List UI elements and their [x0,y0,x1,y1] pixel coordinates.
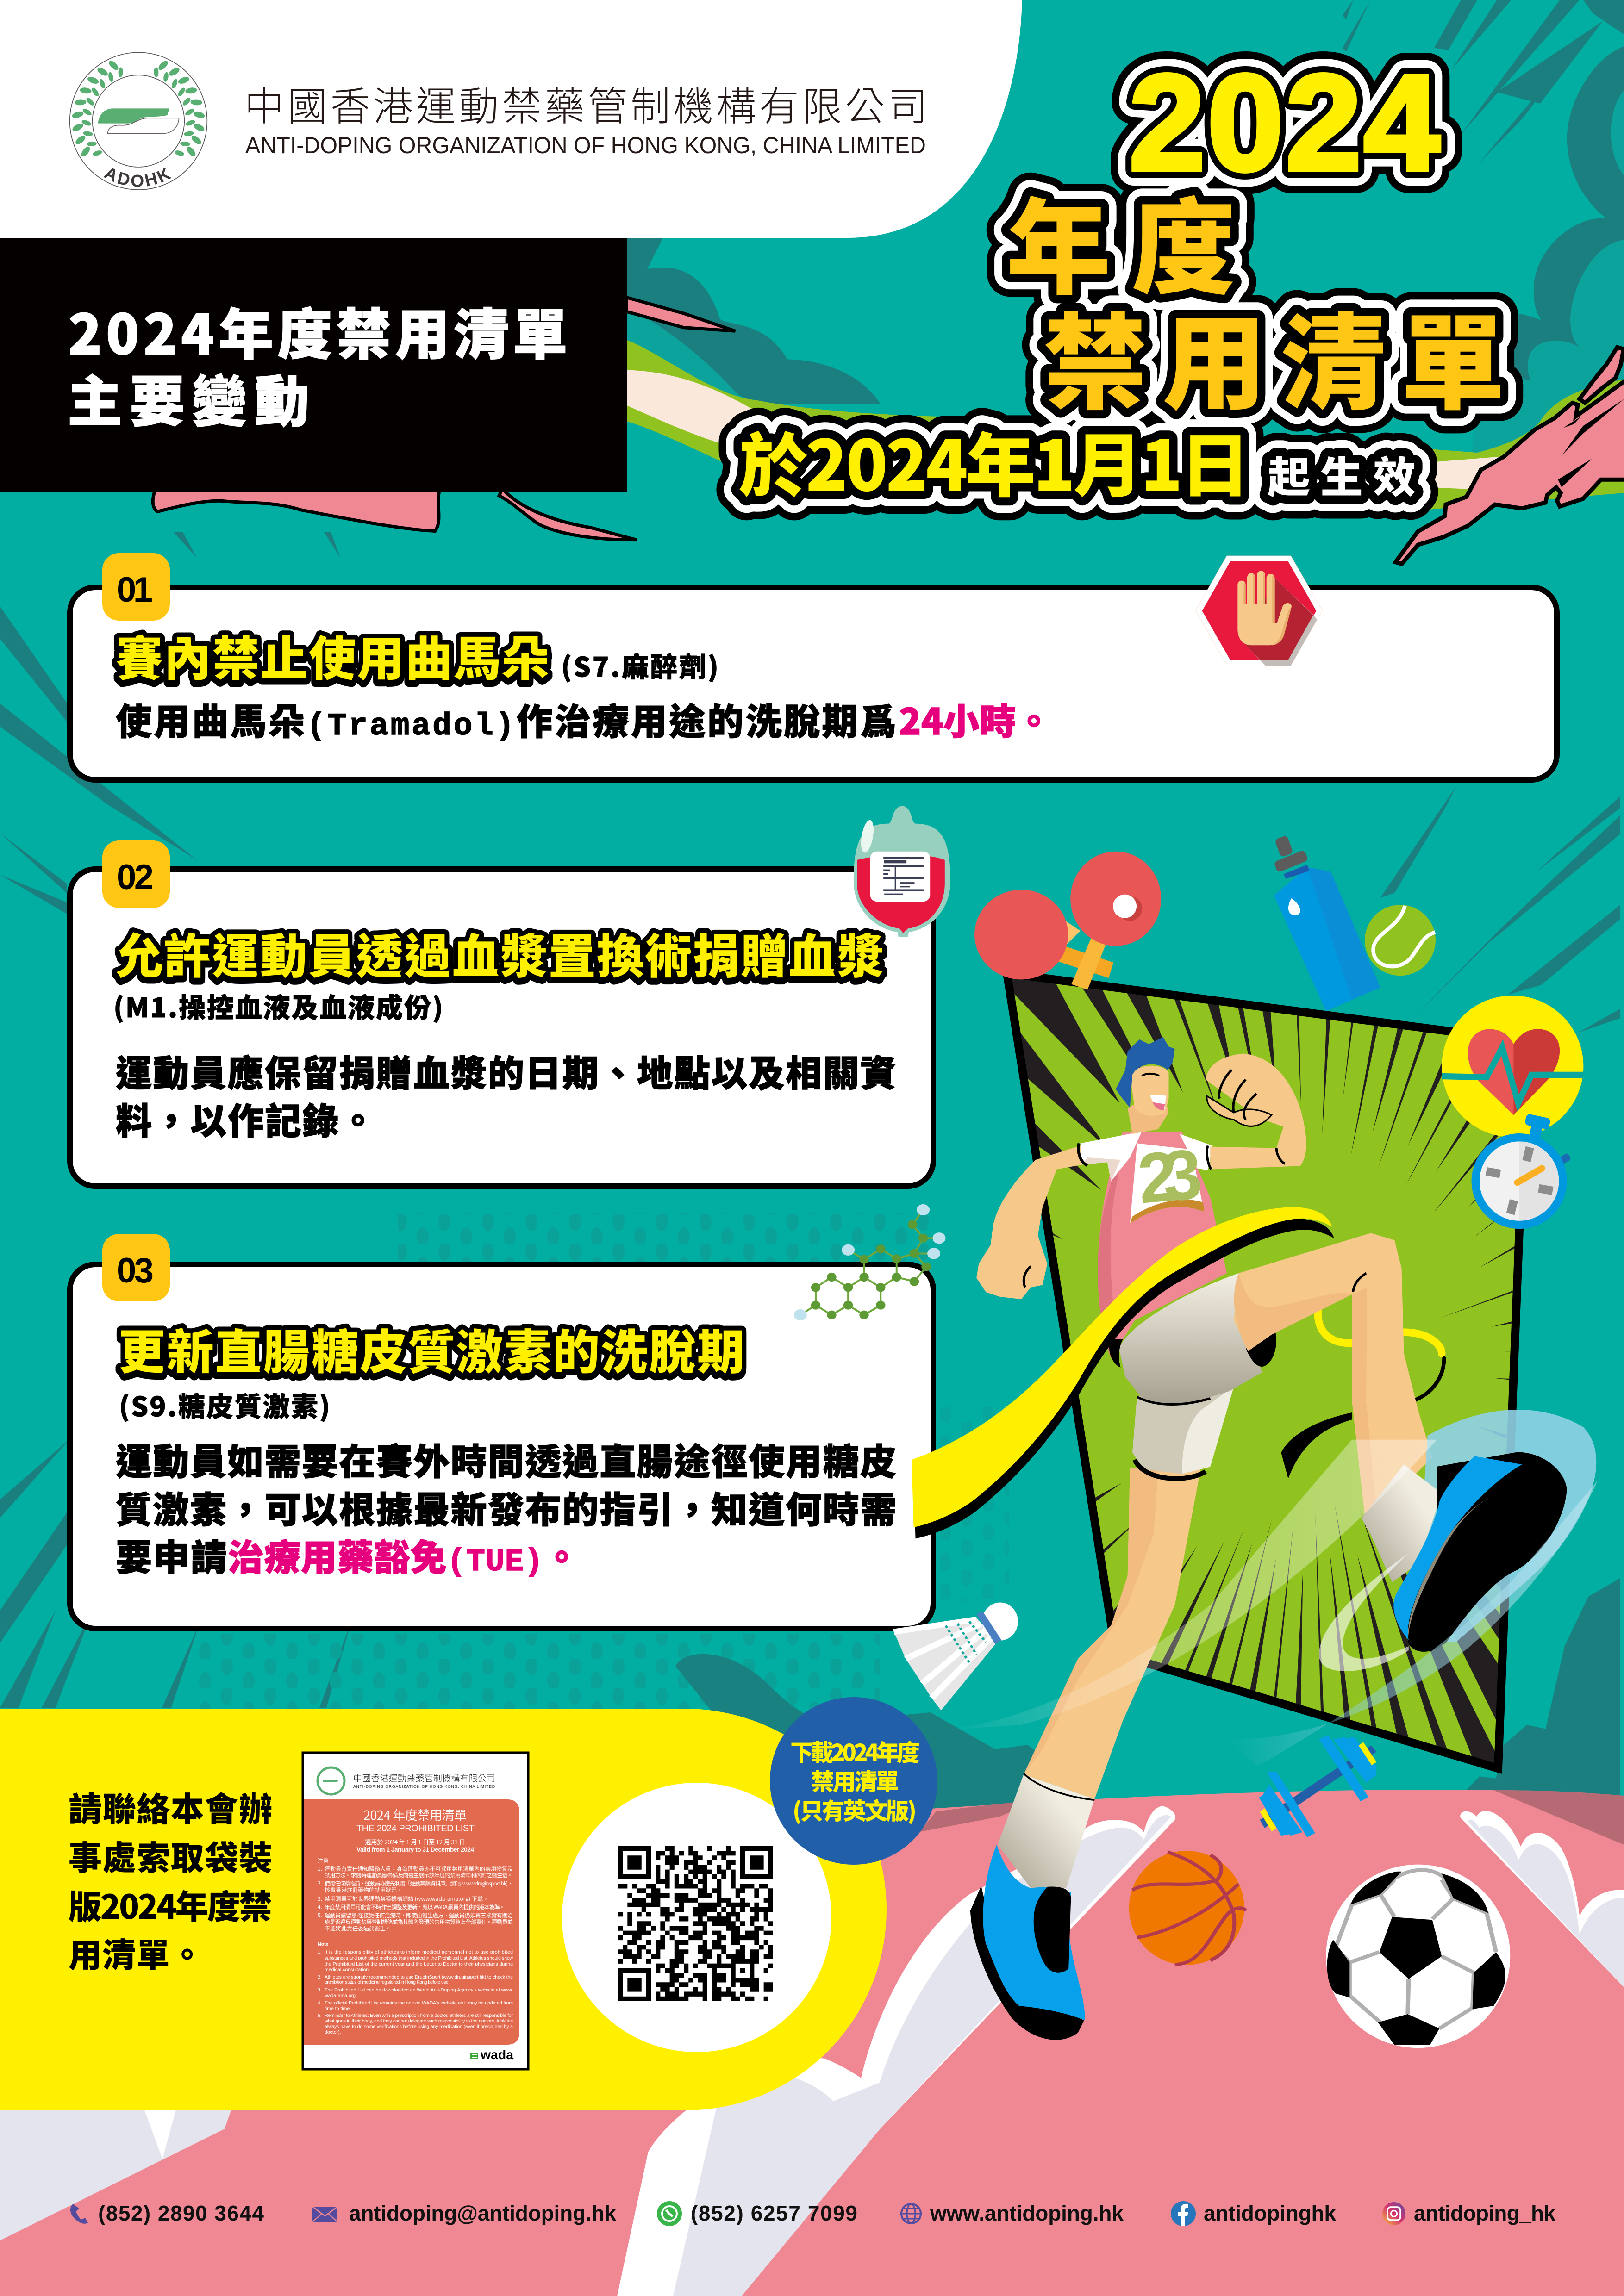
main title: 起生效 [1268,443,1416,505]
icon: stopwatch [1472,1114,1571,1229]
icon: table tennis paddles [974,852,1161,990]
badge 03 [102,1234,170,1301]
whatsapp: (852) 6257 7099 [691,2201,857,2225]
english name: ANTI-DOPING ORGANIZATION OF HONG KONG, CHINA LIMITED [245,132,926,158]
pale dot pattern [194,1213,1009,1710]
main title: 起生效 [1268,443,1416,505]
main title: 禁用清單 [1043,280,1505,430]
mini notes english: 5. [318,2013,322,2018]
mini notes english: prohibition status of medicine registered in Hong Kong before use. [325,1979,450,1985]
badge 03: 03 [117,1251,154,1290]
mini notes chinese: 療是否違反運動禁藥管制規條並為其體內發現的禁用物質負上全部責任。運動員並 [325,1918,513,1926]
main title: 2024 [1129,46,1441,199]
decorative hills upper right [1418,46,1624,510]
heading 03: 更新直腸糖皮質激素的洗脫期 [119,1315,744,1383]
panel heading line two: 主要變動 [68,358,309,437]
request text line two: 事處索取袋裝 [69,1831,272,1879]
mini notes english: Reminder to Athletes: Even with a prescription from a doctor, athletes are still responsible for [325,2013,513,2018]
mini notes chinese: 禁用方法。求醫時運動員應帶備及向醫生展示該年度的禁用清單和內附之醫生信。 [325,1871,513,1879]
yellow request panel [0,1709,887,2110]
badge line three: (只有英文版) [793,1793,917,1826]
mini org english: ANTI-DOPING ORGANIZATION OF HONG KONG, CHINA LIMITED [353,1784,495,1789]
effective date: 於2024年1月1日 [738,411,1250,511]
mini validity: 適用於 2024 年 1 月 1 日至 12 月 31 日 [365,1837,465,1846]
main title: 年度 [1006,164,1236,315]
mini notes english [318,1941,513,2035]
mini notes english: the Prohibited List of the current year and the Letter to Doctor to their physicians during [325,1961,513,1967]
black heading panel [0,238,627,492]
white splash left [617,1806,1175,2296]
raised leg [1234,1233,1432,1528]
main title: 起生效 [1268,443,1416,505]
mini notes english: 2. [318,1974,322,1980]
effective suffix: 起生效 [1268,443,1416,505]
mini notes chinese: 3. [318,1895,322,1903]
mini notes english: wada-ama.org. [324,1993,357,1998]
mini notes english: Note [318,1941,328,1947]
title line: prohibited list: 禁用清單 [1043,280,1505,430]
card 03 [70,1234,933,1629]
body 01: 使用曲馬朵(Tramadol)作治療用途的洗脫期爲 [116,693,896,745]
highlighted TUE: 治療用藥豁免(TUE)。 [228,1529,580,1581]
reference 03: (S9.糖皮質激素) [119,1385,330,1424]
download badge [770,1697,937,1865]
icon: blood bag [854,806,950,937]
mini notes chinese: 使用任何藥物前，運動員亦應先利用「運動禁藥資料庫」網站 (www.druginsport.hk)， [325,1879,513,1887]
pink hand shape right [1395,347,1624,564]
mini notes chinese: 核實香港註冊藥物的禁用狀況。 [325,1886,402,1894]
main title: 於2024年1月1日 [738,411,1250,511]
icon: dumbbell [1259,1735,1376,1837]
pink hand shape upper left [153,298,735,540]
mini notes english: what goes in their body, and they cannot delegate such responsibility to the doctors. Athletes [324,2018,513,2024]
decorative bands beside black panel [626,238,1036,503]
mini notes chinese: 禁用清單可於世界運動禁藥機構網站 (www.wada-ama.org) 下載。 [325,1895,488,1903]
top white header panel [0,0,1022,238]
request text line one: 請聯絡本會辦 [69,1782,272,1831]
mini notes chinese: 4. [318,1903,322,1911]
speed trails [931,1440,1598,1766]
comic burst frame [1003,974,1524,1774]
request text line four: 用清單。 [69,1928,204,1977]
chinese name: 中國香港運動禁藥管制機構有限公司 [244,74,928,132]
body 02 line one: 運動員應保留捐贈血漿的日期、地點以及相關資 [116,1045,896,1097]
facebook: antidopinghk [1204,2201,1336,2225]
phone: (852) 2890 3644 [98,2201,264,2225]
bib number: 23 [1135,1134,1205,1219]
title line: annual: 年度 [1006,164,1236,315]
main title: 年度 [1006,164,1236,315]
organisation logo [70,52,207,190]
request text line three: 版2024年度禁 [69,1880,272,1929]
white splash right [1460,1811,1624,1987]
organisation name [244,74,928,158]
mini notes chinese: 不能將此責任委過於醫生。 [325,1924,391,1932]
pocket prohibited list thumbnail [303,1753,528,2069]
background dark streaks [0,0,1624,1708]
mini notes chinese: 2. [318,1879,322,1887]
reference 01: (S7.麻醉劑) [561,646,718,684]
main title [738,46,1505,511]
light blue swoosh behind raised shoe [1409,1410,1596,1642]
running track ground [0,1790,1624,2296]
rear leg and foot [970,1468,1201,2040]
badge line two: 禁用清單 [811,1764,899,1797]
main title: 於2024年1月1日 [738,411,1250,511]
card 01 [70,553,1557,780]
reference 02: (M1.操控血液及血液成份) [113,986,443,1025]
icon: water bottle [1274,835,1380,1011]
icon: stop hand [1196,556,1323,666]
main title: 禁用清單 [1043,280,1505,430]
rear ribbon loop [1281,1310,1444,1479]
website: www.antidoping.hk [930,2201,1124,2225]
organisation logo: ADOHK [101,162,175,190]
panel heading: 2024年度禁用清單 [69,291,568,370]
mini notes english: time to time. [325,2006,351,2011]
mini wada logo: wada [480,2047,513,2062]
torso, arms and head [976,1037,1306,1358]
badge 01: 01 [117,570,153,610]
mini notes chinese: 1. [318,1865,322,1873]
body 03 line three: 要申請 [116,1529,227,1581]
mini org name: 中國香港運動禁藥管制機構有限公司 [353,1772,495,1784]
contact footer [70,2201,1555,2226]
mini notes chinese: 運動員有責任通知醫務人員，身為運動員亦不可採用禁用清單內的禁用物質及 [325,1865,513,1873]
wedge bottom left [0,2083,241,2240]
mini notes chinese: 5. [318,1911,322,1919]
icon: heart rate [1442,996,1583,1137]
mini title: 2024 年度禁用清單 [363,1805,467,1823]
main title: 年度 [1006,164,1236,315]
mini notes english: The official Prohibited List remains the one on WADA's website as it may be updated from [325,2000,513,2006]
instagram: antidoping_hk [1414,2201,1555,2225]
badge line one: 下載2024年度 [790,1735,920,1768]
QR code [562,1783,831,2052]
badge 01 [102,553,170,621]
badge 02: 02 [117,858,154,897]
title 2024: 2024 [1129,46,1441,199]
hills behind download badge [675,1578,1620,1814]
mini notes english: 4. [318,2000,322,2006]
mini notes english: Athletes are strongly recommended to use DrugInSport (www.druginsport.hk) to check the [325,1974,513,1980]
main title: 2024 [1129,46,1441,199]
icon: football [1326,1865,1510,2048]
main title: 於2024年1月1日 [738,411,1250,511]
mini notes english: medical consultation. [325,1967,370,1972]
icon: molecule [794,1204,946,1320]
finish ribbon [912,1207,1334,1538]
mini notes english: doctor). [325,2029,341,2035]
mini notes english: 1. [318,1949,322,1955]
mini notes english: It is the responsibility of athletes to inform medical personnel not to use prohibited [325,1949,513,1955]
badge 02 [102,840,170,908]
mini subtitle: THE 2024 PROHIBITED LIST [356,1823,475,1834]
icon: shuttlecock [894,1603,1018,1711]
mini validity english: Valid from 1 January to 31 December 2024 [356,1846,474,1853]
mini notes chinese: 注意 [318,1857,329,1865]
icon: tennis ball [1365,905,1436,976]
mini logo [318,1767,344,1794]
main title: 2024 [1129,46,1441,199]
heading 01: 賽內禁止使用曲馬朵 [116,622,549,690]
mini red panel [304,1799,519,2045]
mini notes chinese: 年度禁用清單可能會不時作出調整及更新，應以 WADA 網頁內提供的版本為準。 [325,1903,505,1911]
icon: basketball [1129,1851,1246,1965]
heading 02: 允許運動員透過血漿置換術捐贈血漿 [116,919,884,987]
body 03 line two: 質激素，可以根據最新發布的指引，知道何時需 [116,1481,896,1533]
mini notes english: substances and prohibited methods that included in the Prohibited List. Athletes should show [325,1955,513,1961]
runner figure [912,1037,1598,2040]
mini notes english: always have to do some verifications before using any medication (even if prescribed by a [325,2024,513,2029]
raised shoe [1362,1452,1567,1652]
highlighted duration: 24小時。 [899,693,1052,745]
email: antidoping@antidoping.hk [349,2201,616,2225]
main title: 禁用清單 [1043,280,1505,430]
mini notes english: The Prohibited List can be downloaded on World Anti-Doping Agency's website at www. [325,1987,513,1993]
mini notes chinese [318,1857,513,1932]
body 02 line two: 料，以作記錄。 [116,1093,376,1145]
shorts [1109,1273,1276,1479]
mini notes chinese: 運動員請留意:在接受任何治療時，即使由醫生處方，運動員仍須再三核實有關治 [325,1911,513,1919]
mini notes english: 3. [318,1987,322,1993]
card 02 [70,840,933,1186]
body 03 line one: 運動員如需要在賽外時間透過直腸途徑使用糖皮 [116,1433,896,1485]
